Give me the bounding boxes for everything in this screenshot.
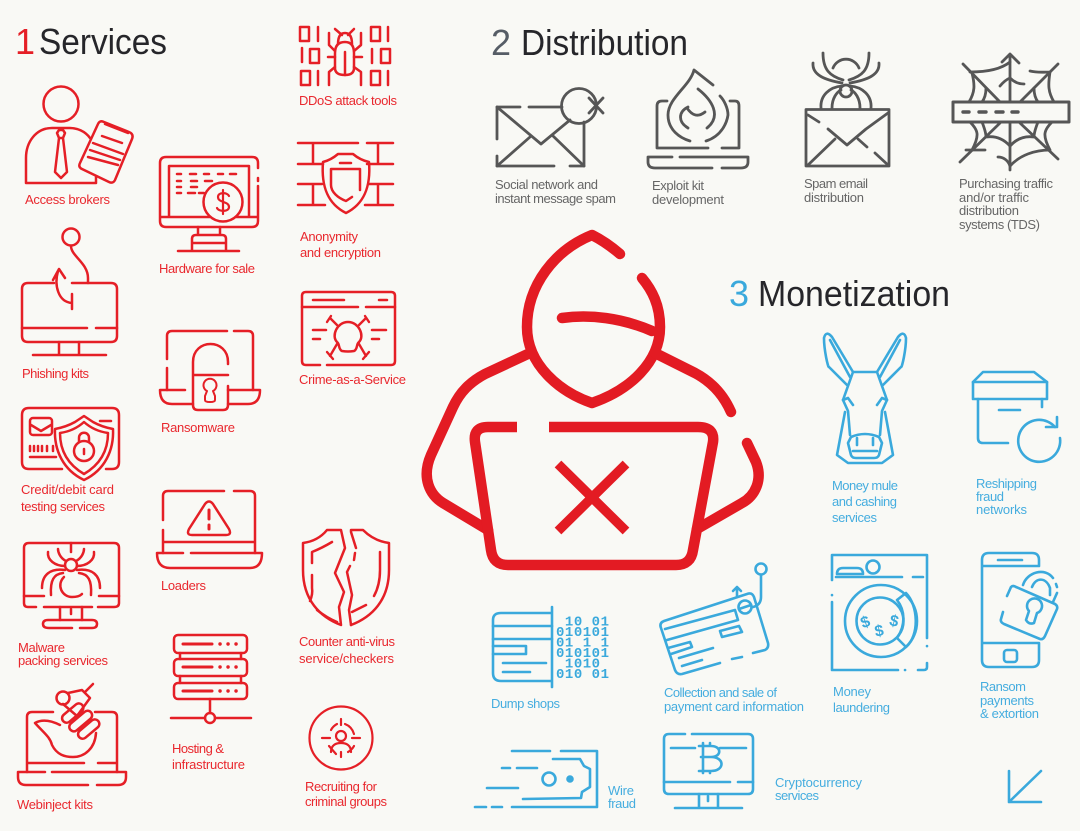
icon: laptop with flame — [648, 70, 748, 168]
icon: envelope with cross bubble — [497, 88, 603, 166]
item: hosting and infrastructure — [171, 635, 251, 772]
item: cryptocurrency services — [664, 734, 862, 808]
item: exploit kit development — [648, 70, 748, 207]
item: crime-as-a-service — [299, 292, 406, 387]
binary digits: 1010 — [556, 656, 609, 672]
label: development — [652, 192, 724, 207]
label — [833, 684, 890, 715]
label: Crime-as-a-Service — [299, 372, 406, 387]
label: Malware — [18, 640, 65, 655]
icon: card with binary data — [493, 607, 552, 687]
dollar signs: $ — [873, 622, 885, 641]
label: distribution — [959, 203, 1019, 218]
label: services — [832, 510, 878, 525]
item: collection and sale of payment card information — [660, 564, 804, 714]
label: fraud — [976, 489, 1004, 504]
item: reshipping fraud networks — [973, 372, 1060, 517]
label — [775, 775, 862, 803]
item: dump shops — [491, 607, 609, 711]
label: Money — [833, 684, 872, 699]
icon: laptop with hand and syringe — [18, 684, 126, 785]
item: money laundering — [832, 555, 927, 715]
label: networks — [976, 502, 1028, 517]
label — [299, 634, 396, 666]
label: & extortion — [980, 706, 1039, 721]
item: spam email distribution — [804, 53, 889, 205]
icon: cracked shield — [303, 530, 389, 625]
binary digits: 01 1 1 — [556, 636, 609, 652]
item: hardware for sale — [159, 157, 258, 276]
label: fraud — [608, 796, 636, 811]
icon: flying banknote — [475, 751, 597, 807]
item: money mule and cashing services — [824, 334, 906, 525]
icon: parcel with refresh arrow — [973, 372, 1060, 462]
label — [652, 178, 724, 207]
label: distribution — [804, 190, 864, 205]
icon: laptop with warning triangle — [157, 491, 262, 568]
label: Ransomware — [161, 420, 235, 435]
label: Reshipping — [976, 476, 1037, 491]
label — [21, 482, 114, 514]
item: credit/debit card testing — [21, 408, 119, 514]
label: laundering — [833, 700, 890, 715]
item: counter anti-virus service/checkers — [299, 530, 396, 666]
icon: person with document — [26, 86, 133, 183]
icon: washing machine with dollars — [832, 555, 927, 670]
heading: 1 Services: Services — [39, 21, 167, 62]
label: Webinject kits — [17, 797, 94, 812]
label: service/checkers — [299, 651, 394, 666]
label: Loaders — [161, 578, 206, 593]
binary digits: 010101 — [556, 646, 609, 662]
hood — [527, 235, 660, 403]
binary digits — [556, 614, 609, 683]
laptop — [475, 427, 713, 565]
label: criminal groups — [305, 794, 388, 809]
item: access brokers — [25, 86, 133, 207]
label — [305, 779, 388, 809]
icon: card with shield — [22, 408, 119, 480]
binary digits: 010101 — [556, 625, 609, 641]
icon: spider on envelope — [806, 53, 889, 166]
label: payment card information — [664, 699, 804, 714]
label: Collection and sale of — [664, 685, 777, 700]
heading: 3 Monetization: Monetization — [758, 273, 950, 314]
icon: laptop with padlock — [160, 331, 260, 410]
item: ransom payments and extortion — [980, 553, 1057, 721]
item: DDoS attack tools — [299, 27, 398, 108]
label: Counter anti-virus — [299, 634, 396, 649]
icon: spider web with banner — [953, 54, 1069, 170]
label: systems (TDS) — [959, 217, 1040, 232]
item: ransomware — [160, 331, 260, 435]
dollar signs: $ — [858, 613, 873, 632]
item: webinject kits — [17, 684, 126, 812]
label: Hosting & — [172, 741, 224, 756]
label — [804, 176, 868, 205]
label: testing services — [21, 499, 106, 514]
label: Cryptocurrency — [775, 775, 862, 790]
label — [959, 176, 1054, 232]
label — [300, 229, 381, 260]
label: Social network and — [495, 177, 598, 192]
label: Recruiting for — [305, 779, 378, 794]
item: anonymity and encryption — [298, 143, 393, 260]
label — [832, 478, 898, 525]
icon: donkey head — [824, 334, 906, 463]
heading: 3 Monetization: 3 — [729, 273, 749, 314]
icon: hooked payment card — [660, 564, 768, 674]
label: Dump shops — [491, 696, 560, 711]
visor — [562, 317, 652, 331]
label — [495, 177, 616, 206]
label: Spam email — [804, 176, 868, 191]
label: and cashing — [832, 494, 897, 509]
label: DDoS attack tools — [299, 93, 398, 108]
label: services — [775, 788, 820, 803]
label: Wire — [608, 783, 634, 798]
label: Access brokers — [25, 192, 110, 207]
icon: monitor with hook — [22, 228, 117, 355]
dollar signs — [858, 612, 900, 641]
heading: 1 Services: 1 — [15, 21, 35, 62]
icon: brick wall with shield — [298, 143, 393, 213]
hacker figure — [427, 235, 759, 565]
icon: target on person — [310, 706, 372, 770]
label — [980, 679, 1039, 721]
icon: browser with skull — [302, 292, 395, 365]
label: packing services — [18, 653, 108, 668]
binary digits: 10 01 — [556, 614, 609, 630]
heading: 2 Distribution: Distribution — [521, 22, 688, 63]
item: malware packing services — [18, 543, 119, 668]
item: recruiting for criminal groups — [305, 706, 388, 809]
label: Credit/debit card — [21, 482, 114, 497]
right shoulder and arm — [655, 353, 759, 529]
icon: monitor with dollar coin — [160, 157, 258, 251]
label: instant message spam — [495, 191, 616, 206]
icon: monitor with bitcoin — [664, 734, 753, 808]
label: and/or traffic — [959, 190, 1030, 205]
label: Anonymity — [300, 229, 358, 244]
label: infrastructure — [172, 757, 245, 772]
label — [976, 476, 1037, 517]
label: Money mule — [832, 478, 898, 493]
item: purchasing traffic and/or TDS — [953, 54, 1069, 232]
left shoulder and arm — [427, 353, 530, 530]
label — [664, 685, 804, 714]
arrow: diagonal corner mark — [1009, 771, 1041, 802]
heading: 2 Distribution: 2 — [491, 22, 511, 63]
icon: monitor with spider — [24, 543, 119, 628]
label: Exploit kit — [652, 178, 704, 193]
label: and encryption — [300, 245, 381, 260]
label: payments — [980, 693, 1034, 708]
item: phishing kits — [22, 228, 117, 381]
label — [608, 783, 636, 811]
icon: phone with padlock — [982, 553, 1057, 667]
dollar signs: $ — [888, 612, 900, 631]
label: Hardware for sale — [159, 261, 255, 276]
label: Purchasing traffic — [959, 176, 1054, 191]
label — [18, 640, 108, 668]
cross on laptop — [558, 464, 626, 531]
label: Ransom — [980, 679, 1026, 694]
label — [172, 741, 245, 772]
binary digits: 010 01 — [556, 667, 609, 683]
icon: server rack — [171, 635, 251, 723]
icon: bug with binary — [300, 27, 390, 85]
item: loaders — [157, 491, 262, 593]
item: wire fraud — [475, 751, 636, 811]
label: Phishing kits — [22, 366, 90, 381]
item: social network and instant message spam — [495, 88, 616, 206]
